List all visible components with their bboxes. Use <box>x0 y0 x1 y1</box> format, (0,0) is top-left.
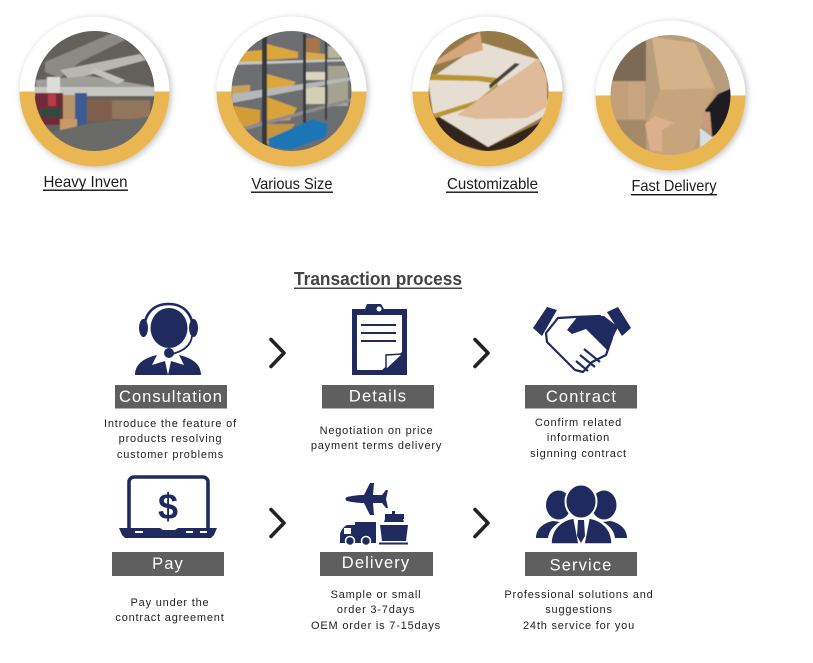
text: delivery description: OEM order is 7-15days <box>311 620 441 632</box>
arrow: consultation to details <box>271 340 284 366</box>
label bar: Delivery: Delivery <box>342 554 410 572</box>
text: contract description <box>530 417 627 460</box>
icon: pay laptop with dollar: $ <box>158 486 178 527</box>
text: delivery description: order 3-7days <box>337 604 415 616</box>
text: details description: payment terms delivery <box>311 440 442 452</box>
photo: man carrying a carton <box>610 34 732 156</box>
photo: warehouse floor <box>34 30 156 152</box>
label bar: Service <box>525 552 637 576</box>
label bar: Pay <box>112 552 224 576</box>
label bar: Details <box>322 385 434 408</box>
label bar: Details: Details <box>349 388 407 406</box>
icon: pay laptop with dollar <box>119 477 217 538</box>
photo: shoe last on paper <box>428 30 550 152</box>
text: contract description: Confirm related <box>535 417 622 429</box>
label bar: Contract: Contract <box>546 388 617 406</box>
text: details description <box>311 425 442 452</box>
icon: delivery plane truck ship <box>340 483 408 546</box>
label bar: Contract <box>525 385 637 408</box>
text: service description: suggestions <box>545 604 613 616</box>
text: service description: Professional solutions and <box>504 589 654 601</box>
panel: Fast Delivery photo badge <box>596 20 747 172</box>
text: consultation description: Introduce the feature of <box>104 418 237 430</box>
text: pay description: Pay under the <box>131 597 209 609</box>
text: pay description: contract agreement <box>115 612 225 624</box>
label: Heavy Inven: Heavy Inven <box>44 174 128 191</box>
text: contract description: information <box>547 432 610 444</box>
label bar: Pay: Pay <box>152 555 184 573</box>
panel: Various Size photo badge <box>216 16 368 168</box>
icon: service team of people <box>536 484 627 544</box>
text: pay description <box>115 597 225 624</box>
icon: details clipboard <box>352 304 407 375</box>
label bar: Consultation: Consultation <box>119 388 223 406</box>
label: Customizable: Customizable <box>447 176 538 193</box>
label: Fast Delivery: Fast Delivery <box>632 178 716 195</box>
label bar: Service: Service <box>550 556 612 574</box>
panel: Customizable photo badge <box>412 16 564 168</box>
label: Various Size: Various Size <box>252 176 333 193</box>
text: consultation description: customer problems <box>117 449 224 461</box>
label bar: Delivery <box>320 552 433 576</box>
text: delivery description: Sample or small <box>331 589 421 601</box>
title: Transaction process <box>294 269 462 289</box>
panel: Heavy Inven photo badge <box>20 16 171 168</box>
text: service description <box>504 589 654 632</box>
text: consultation description <box>104 418 237 461</box>
icon: contract handshake <box>533 307 631 372</box>
arrow: details to contract <box>475 340 488 366</box>
text: delivery description <box>311 589 441 632</box>
text: contract description: signning contract <box>530 448 627 460</box>
icon: consultation headset agent <box>135 304 201 375</box>
arrow: pay to delivery <box>271 510 284 536</box>
text: details description: Negotiation on price <box>320 425 433 437</box>
arrow: delivery to service <box>475 510 488 536</box>
text: consultation description: products resolving <box>119 433 222 445</box>
photo: shelves of shoe lasts <box>230 30 354 154</box>
text: service description: 24th service for you <box>523 620 635 632</box>
